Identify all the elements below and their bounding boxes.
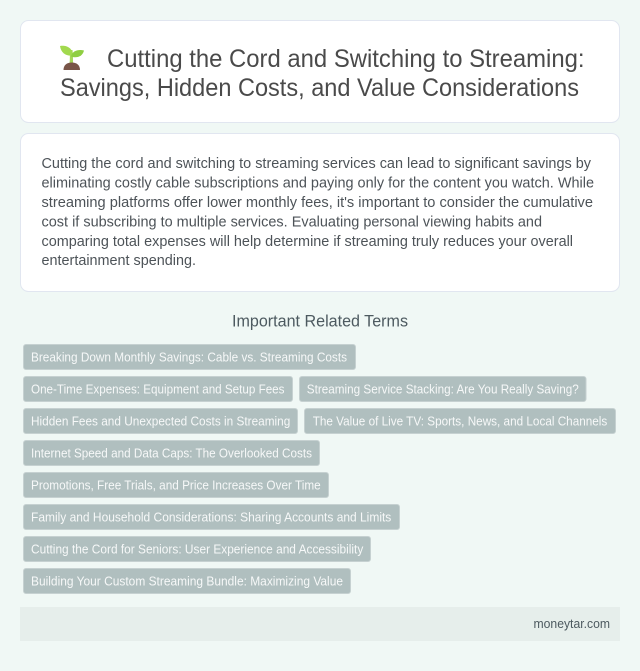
tag: Streaming Service Stacking: Are You Really Saving? [307, 382, 579, 396]
tag: Building Your Custom Streaming Bundle: Maximizing Value [31, 574, 343, 588]
tag: Internet Speed and Data Caps: The Overlooked Costs [31, 446, 312, 460]
summary text: comparing total expenses will help determine if streaming truly reduces your overall [42, 233, 573, 250]
title text [60, 45, 584, 102]
tag: Breaking Down Monthly Savings: Cable vs. Streaming Costs [31, 350, 347, 364]
tag: The Value of Live TV: Sports, News, and Local Channels [313, 414, 608, 428]
summary text: Cutting the cord and switching to streaming services can lead to significant savings by [42, 155, 591, 172]
tag [24, 568, 350, 594]
summary text: eliminating costly cable subscriptions and paying only for the content you watch. While [42, 174, 594, 192]
footer source text: moneytar.com [534, 616, 610, 631]
tag [300, 376, 586, 402]
tag: Promotions, Free Trials, and Price Increases Over Time [31, 478, 321, 492]
tag [24, 536, 370, 562]
tag: Hidden Fees and Unexpected Costs in Streaming [31, 414, 290, 428]
summary text: streaming platforms offer lower monthly fees, it's important to consider the cumulative [42, 194, 593, 211]
summary text: entertainment spending. [42, 252, 196, 269]
tag [24, 408, 298, 434]
footer [20, 607, 620, 641]
panel: summary [20, 134, 620, 292]
tag [24, 472, 328, 498]
title text: Savings, Hidden Costs, and Value Considerations [60, 74, 579, 102]
tag [24, 376, 292, 402]
summary text [42, 155, 594, 269]
tag: Cutting the Cord for Seniors: User Experience and Accessibility [31, 542, 364, 556]
panel: title [20, 20, 620, 122]
tag list [24, 344, 616, 594]
title text: Cutting the Cord and Switching to Streaming: [107, 45, 584, 73]
summary text: cost if subscribing to multiple services. Evaluating personal viewing habits and [42, 214, 542, 230]
heading: related terms: Important Related Terms [232, 312, 408, 330]
icon: sprout [60, 46, 84, 70]
tag [24, 504, 400, 530]
tag: One-Time Expenses: Equipment and Setup Fees [31, 382, 285, 396]
tag: Family and Household Considerations: Sharing Accounts and Limits [31, 510, 392, 524]
tag [24, 440, 320, 466]
tag [24, 344, 356, 370]
tag [304, 408, 616, 434]
